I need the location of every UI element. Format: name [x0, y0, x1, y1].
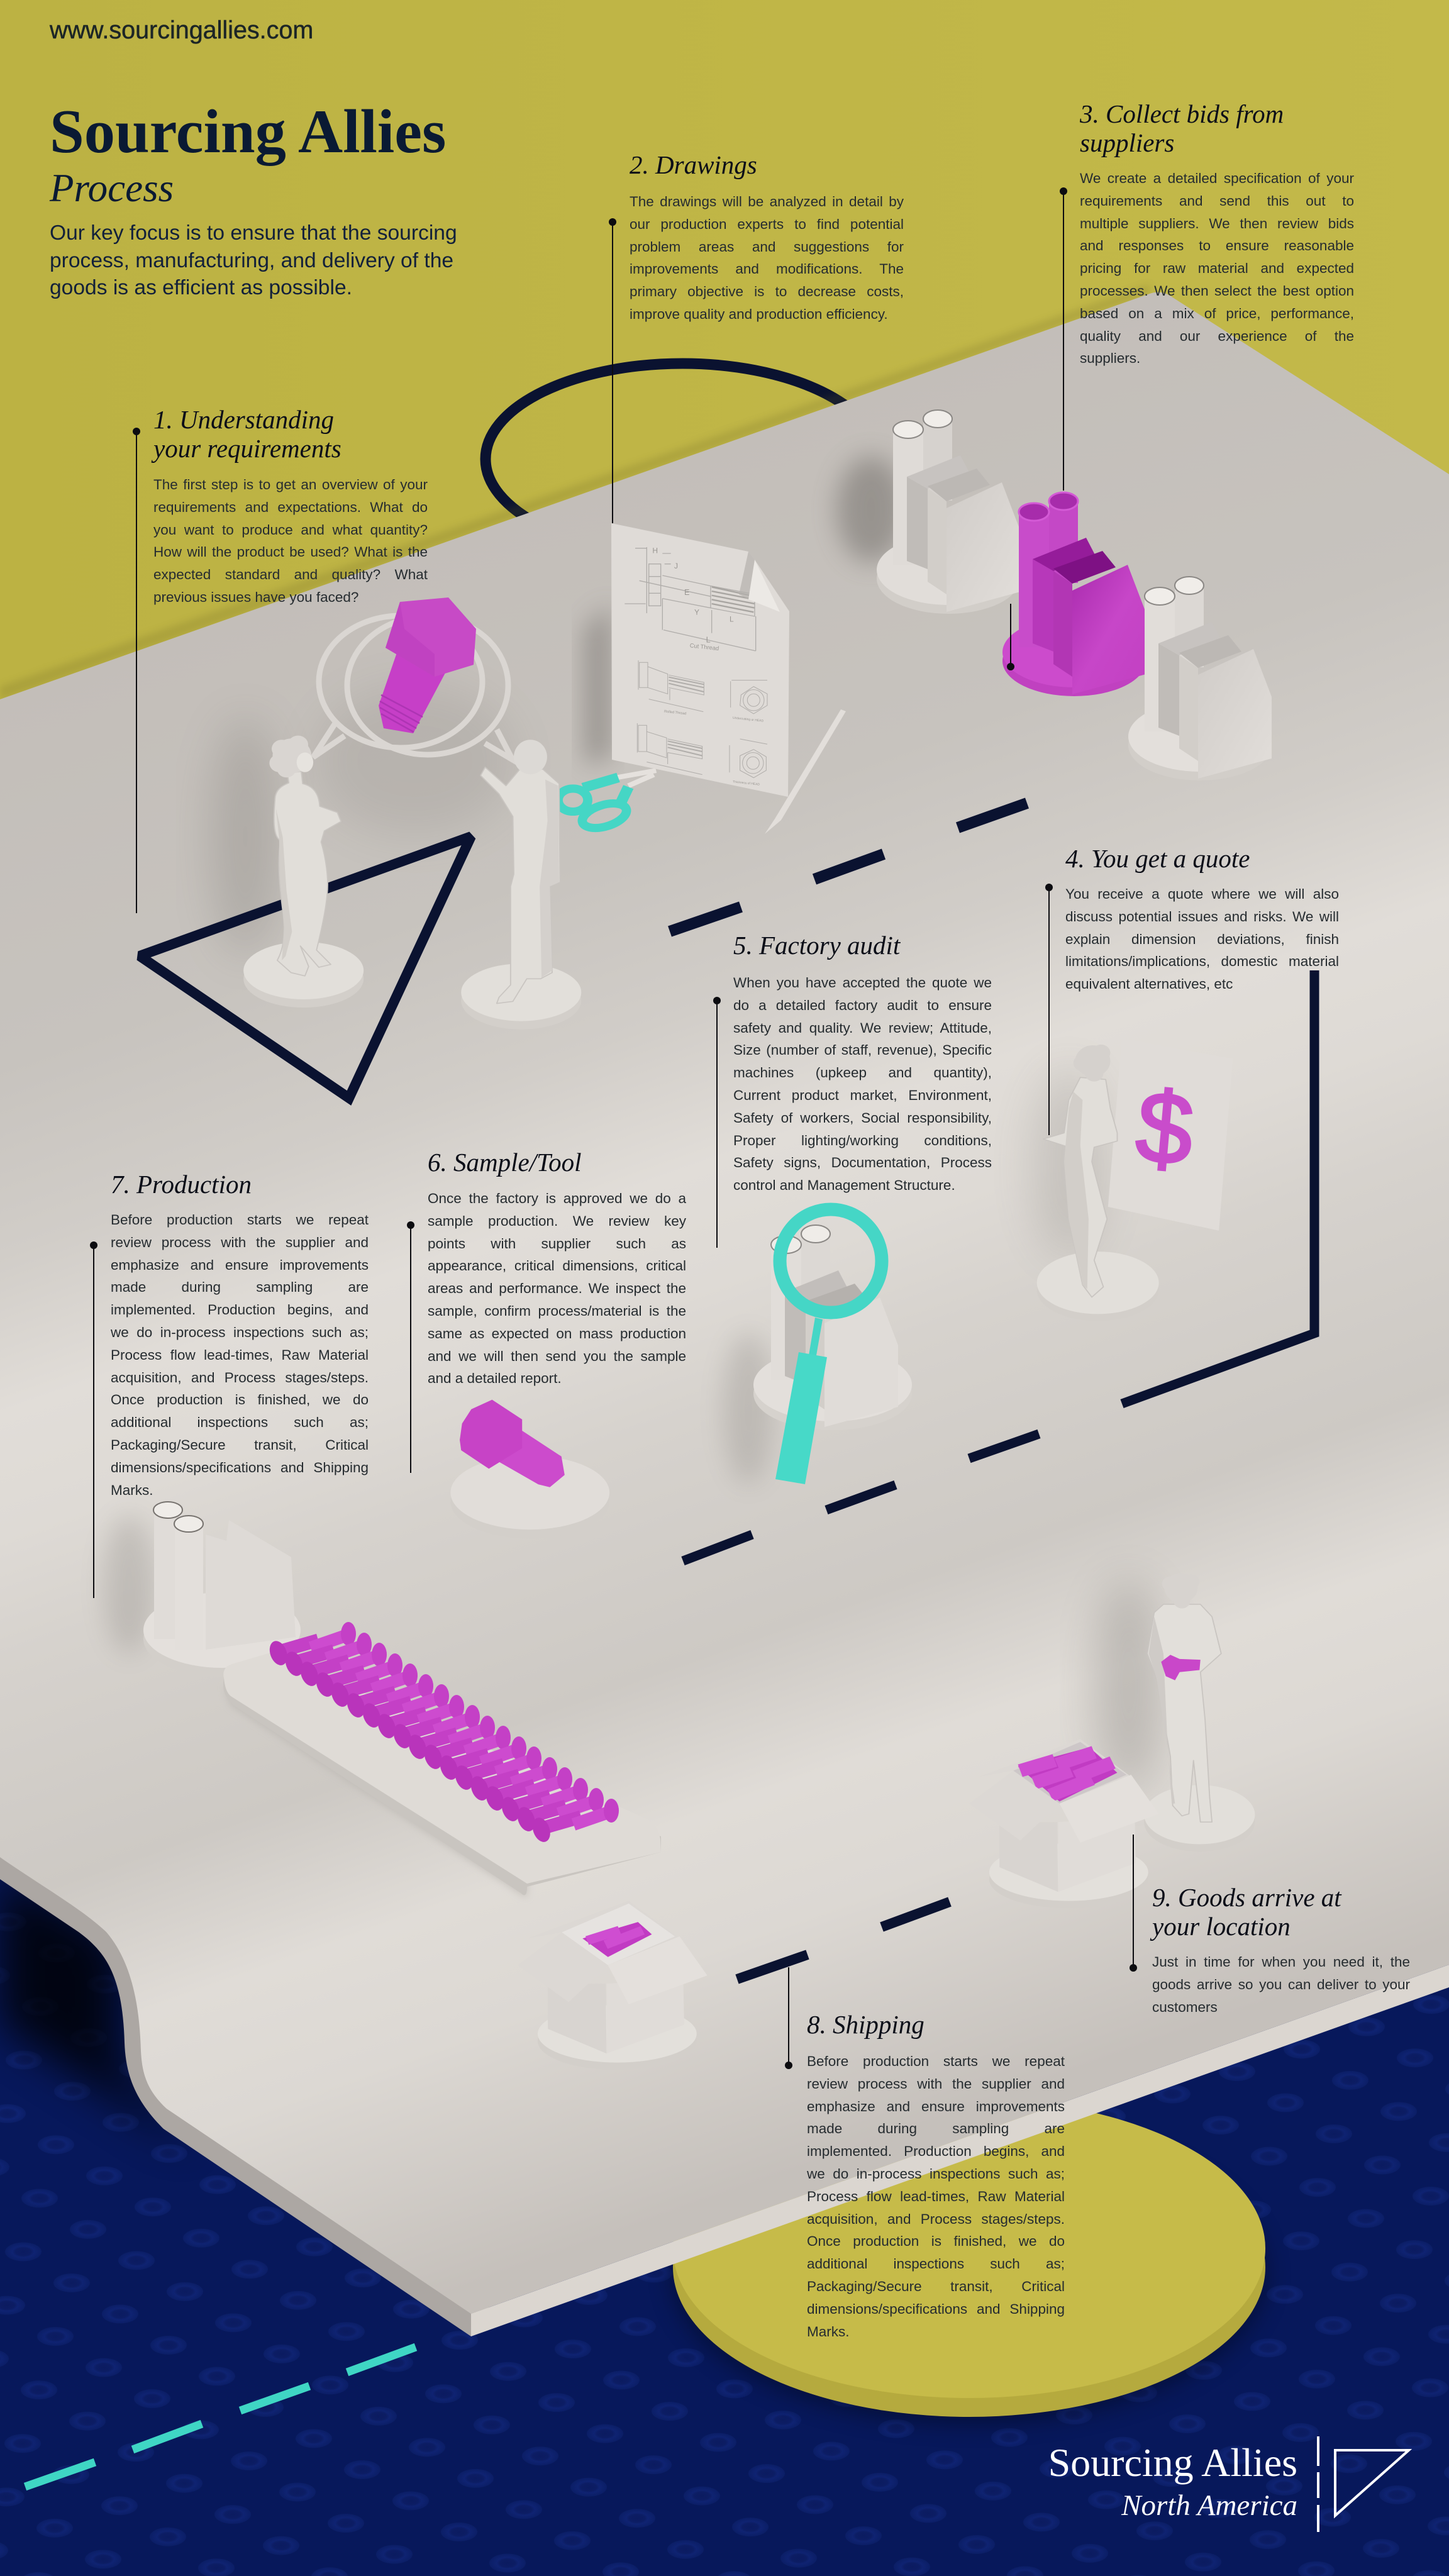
sample bolt on disc [450, 1400, 609, 1538]
body text: safety and quality. We review; Attitude, [733, 1020, 992, 1036]
body text: points with supplier such as [428, 1236, 686, 1252]
heading: 5. Factory audit [733, 931, 900, 960]
body text: The first step is to get an overview of your [153, 477, 428, 492]
pointer: step 7 [90, 1241, 97, 1598]
open box with bolts, step 8 [518, 1901, 708, 2070]
body text: implemented. Production begins, and [111, 1302, 369, 1318]
body text [1065, 886, 1339, 992]
factory: magenta, selected [1002, 492, 1146, 696]
body text: based on a mix of price, performance, [1080, 306, 1354, 321]
body text: Before production starts we repeat [807, 2053, 1065, 2069]
woman holding bolt on disc [1144, 1573, 1255, 1852]
soft ambient shadows on platform [104, 456, 1163, 1792]
title: Sourcing Allies [50, 97, 446, 166]
body text: Once production is finished, we do [111, 1392, 369, 1407]
body text [733, 975, 992, 1193]
intro text: Our key focus is to ensure that the sourcing [50, 221, 457, 245]
technical drawing sheet [611, 523, 789, 797]
body text: and we will then send you the sample [428, 1348, 686, 1364]
heading [1152, 1883, 1410, 1941]
heading: 2. Drawings [630, 150, 757, 179]
speech bubbles [313, 616, 513, 760]
heading: your requirements [153, 434, 341, 463]
body text: improve quality and production efficiency. [630, 306, 888, 322]
factory: grey, back [877, 410, 1020, 614]
pen [765, 709, 846, 834]
scissors [558, 770, 656, 833]
heading: 8. Shipping [807, 2010, 924, 2039]
body text: You receive a quote where we will also [1065, 886, 1339, 902]
body text: our production experts to find potential [630, 216, 904, 232]
technical drawing sheet: Cut Thread [689, 642, 719, 652]
panel: step 3 [1079, 99, 1354, 366]
technical drawing sheet: L [730, 614, 734, 623]
body text: acquisition, and Process stages/steps. [111, 1370, 369, 1385]
yellow disc below platform [673, 2099, 1265, 2422]
production factory [143, 1502, 301, 1677]
dollar board and woman [1037, 1038, 1233, 1321]
body text: made during sampling are [807, 2121, 1065, 2136]
pointer: step 2 [609, 218, 616, 523]
website url: www.sourcingallies.com [50, 16, 313, 44]
row of magenta bolts on conveyor [267, 1622, 619, 1845]
heading: 3. Collect bids from [1080, 99, 1284, 128]
body text: Size (number of staff, revenue), Specific [733, 1042, 992, 1058]
heading: 9. Goods arrive at [1152, 1883, 1341, 1912]
body text: sample production. We review key [428, 1213, 686, 1229]
body text: dimensions/specifications and Shipping [111, 1460, 369, 1475]
body text: primary objective is to decrease costs, [630, 284, 904, 299]
factory: grey, front [1128, 577, 1272, 780]
body text: requirements and send this out to [1080, 193, 1354, 209]
body text [111, 1209, 369, 1501]
heading: 4. You get a quote [1065, 844, 1250, 873]
body text: Safety signs, Documentation, Process [733, 1155, 992, 1170]
body text: limitations/implications, domestic material [1065, 953, 1339, 969]
body text: improvements and modifications. The [630, 261, 904, 277]
woman figure on disc [243, 736, 364, 1008]
body text: explain dimension deviations, finish [1065, 931, 1339, 947]
body text: Proper lighting/working conditions, [733, 1133, 992, 1148]
navy dashed path 2 [683, 1434, 1039, 1561]
body text: When you have accepted the quote we [733, 975, 992, 991]
heading [151, 405, 341, 463]
body text: dimensions/specifications and Shipping [807, 2301, 1065, 2317]
body text: do a detailed factory audit to ensure [733, 997, 992, 1013]
dollar sign: $ [1132, 1069, 1197, 1187]
body text: requirements and expectations. What do [153, 499, 428, 515]
body text: we do in-process inspections such as; [807, 2166, 1065, 2182]
pointer: step 1 [133, 428, 140, 913]
body text: expected standard and quality? What [153, 567, 428, 582]
body text: How will the product be used? What is the [153, 544, 428, 560]
body text [428, 1187, 686, 1390]
technical drawing sheet: H [652, 546, 658, 555]
body text: made during sampling are [111, 1279, 369, 1295]
body text: goods arrive so you can deliver to your [1152, 1977, 1410, 1992]
body text: processes. We then select the best option [1080, 283, 1354, 299]
heading: your location [1152, 1912, 1291, 1941]
body text: equivalent alternatives, etc [1065, 976, 1233, 992]
panel: step 8 [807, 2010, 1065, 2343]
body text: emphasize and ensure improvements [807, 2099, 1065, 2114]
body text: review process with the supplier and [111, 1235, 369, 1250]
body text: Current product market, Environment, [733, 1087, 992, 1103]
man figure on disc [461, 740, 581, 1030]
body text: Just in time for when you need it, the [1152, 1954, 1410, 1970]
body text: and a detailed report. [428, 1370, 562, 1386]
cyan dashes on navy floor [25, 2347, 416, 2487]
panel: step 1 [151, 405, 428, 605]
navy triangle route [140, 836, 471, 1098]
body text: we do in-process inspections such as; [111, 1324, 369, 1340]
body text: sample, confirm process/material is the [428, 1303, 686, 1319]
body text: Process flow lead-times, Raw Material [111, 1347, 369, 1363]
body text: Before production starts we repeat [111, 1212, 369, 1228]
panel: step 6 [428, 1148, 686, 1386]
technical drawing sheet: E [684, 588, 689, 597]
magnifying glass [775, 1209, 882, 1484]
body text: We create a detailed specification of your [1080, 170, 1354, 186]
intro text [50, 221, 457, 299]
pointer: step 3 [1007, 187, 1067, 670]
technical drawing sheet: J [674, 562, 678, 570]
navy dashed path 3 [737, 1902, 950, 1979]
body text: discuss potential issues and risks. We will [1065, 909, 1339, 924]
body text: problem areas and suggestions for [630, 239, 904, 255]
magenta bolt [379, 597, 476, 733]
logo name: Sourcing Allies [1048, 2440, 1297, 2485]
logo mark [1318, 2436, 1409, 2532]
platform side walls [0, 1824, 1449, 2336]
body text: Process flow lead-times, Raw Material [807, 2189, 1065, 2204]
open box with bolts, step 9 [969, 1739, 1159, 1908]
heading: suppliers [1080, 128, 1174, 157]
pointer: step 6 [407, 1221, 414, 1473]
platform shadow on yellow [0, 284, 1150, 699]
panel: step 4 [1065, 844, 1339, 992]
body text [807, 2050, 1065, 2343]
body text: Packaging/Secure transit, Critical [807, 2279, 1065, 2294]
body text: Marks. [111, 1482, 153, 1498]
body text: Once production is finished, we do [807, 2233, 1065, 2249]
technical drawing sheet: Thickness of HEAD [733, 780, 760, 787]
body text: additional inspections such as; [807, 2256, 1065, 2272]
body text: suppliers. [1080, 350, 1140, 366]
navy L-shaped path [1122, 970, 1314, 1404]
body text: pricing for raw material and expected [1080, 260, 1354, 276]
body text: Packaging/Secure transit, Critical [111, 1437, 369, 1453]
intro text: goods is as efficient as possible. [50, 276, 352, 299]
body text: appearance, critical dimensions, critical [428, 1258, 686, 1274]
body text: same as expected on mass production [428, 1326, 686, 1341]
heading: 6. Sample/Tool [428, 1148, 582, 1177]
body text [1080, 170, 1354, 366]
pointer: step 5 [713, 997, 721, 1248]
pointer: step 8 [785, 1967, 792, 2069]
logo wordmark [1048, 2441, 1297, 2521]
body text: control and Management Structure. [733, 1177, 955, 1193]
technical drawing sheet: Undercutting or HEAD [733, 716, 764, 723]
heading [1079, 99, 1284, 157]
technical drawing sheet: Rolled Thread [664, 710, 687, 716]
body text [630, 194, 904, 322]
subtitle: Process [50, 166, 174, 210]
body text: Once the factory is approved we do a [428, 1191, 686, 1206]
body text: areas and performance. We inspect the [428, 1280, 686, 1296]
technical drawing sheet: Y [694, 608, 699, 617]
platform shadow on navy [0, 1871, 195, 2151]
heading: 1. Understanding [153, 405, 334, 434]
body text: quality and our experience of the [1080, 328, 1354, 344]
body text: and responses to ensure reasonable [1080, 238, 1354, 253]
body text: emphasize and ensure improvements [111, 1257, 369, 1273]
navy dashed path 1 [670, 803, 1027, 931]
body text: review process with the supplier and [807, 2076, 1065, 2092]
navy studded floor [0, 1824, 1449, 2576]
heading: 7. Production [111, 1170, 252, 1199]
panel: step 5 [733, 931, 992, 1193]
body text: additional inspections such as; [111, 1414, 369, 1430]
body text [153, 477, 428, 605]
body text: previous issues have you faced? [153, 589, 358, 605]
platform top surface [0, 292, 1449, 2314]
body text: customers [1152, 1999, 1218, 2015]
body text: The drawings will be analyzed in detail by [630, 194, 904, 209]
technical drawing sheet: L [706, 636, 711, 645]
body text: multiple suppliers. We then review bids [1080, 216, 1354, 231]
body text: Marks. [807, 2324, 849, 2340]
intro text: process, manufacturing, and delivery of the [50, 249, 453, 272]
pointer: step 9 [1130, 1835, 1137, 1972]
body text: acquisition, and Process stages/steps. [807, 2211, 1065, 2227]
yellow background [0, 0, 1449, 1887]
logo region: North America [1121, 2489, 1297, 2522]
body text: Safety of workers, Social responsibility, [733, 1110, 992, 1126]
body text: implemented. Production begins, and [807, 2143, 1065, 2159]
panel: step 7 [111, 1170, 369, 1501]
body text: machines (upkeep and quantity), [733, 1065, 992, 1080]
conveyor tray [223, 1652, 661, 1898]
panel: step 9 [1152, 1883, 1410, 2018]
pointer: step 4 [1045, 884, 1053, 1135]
black ring behind platform [486, 364, 879, 555]
body text: you want to produce and what quantity? [153, 522, 428, 538]
panel: step 2 [630, 150, 904, 322]
factory under magnifier [753, 1225, 912, 1430]
body text [1152, 1951, 1410, 2018]
